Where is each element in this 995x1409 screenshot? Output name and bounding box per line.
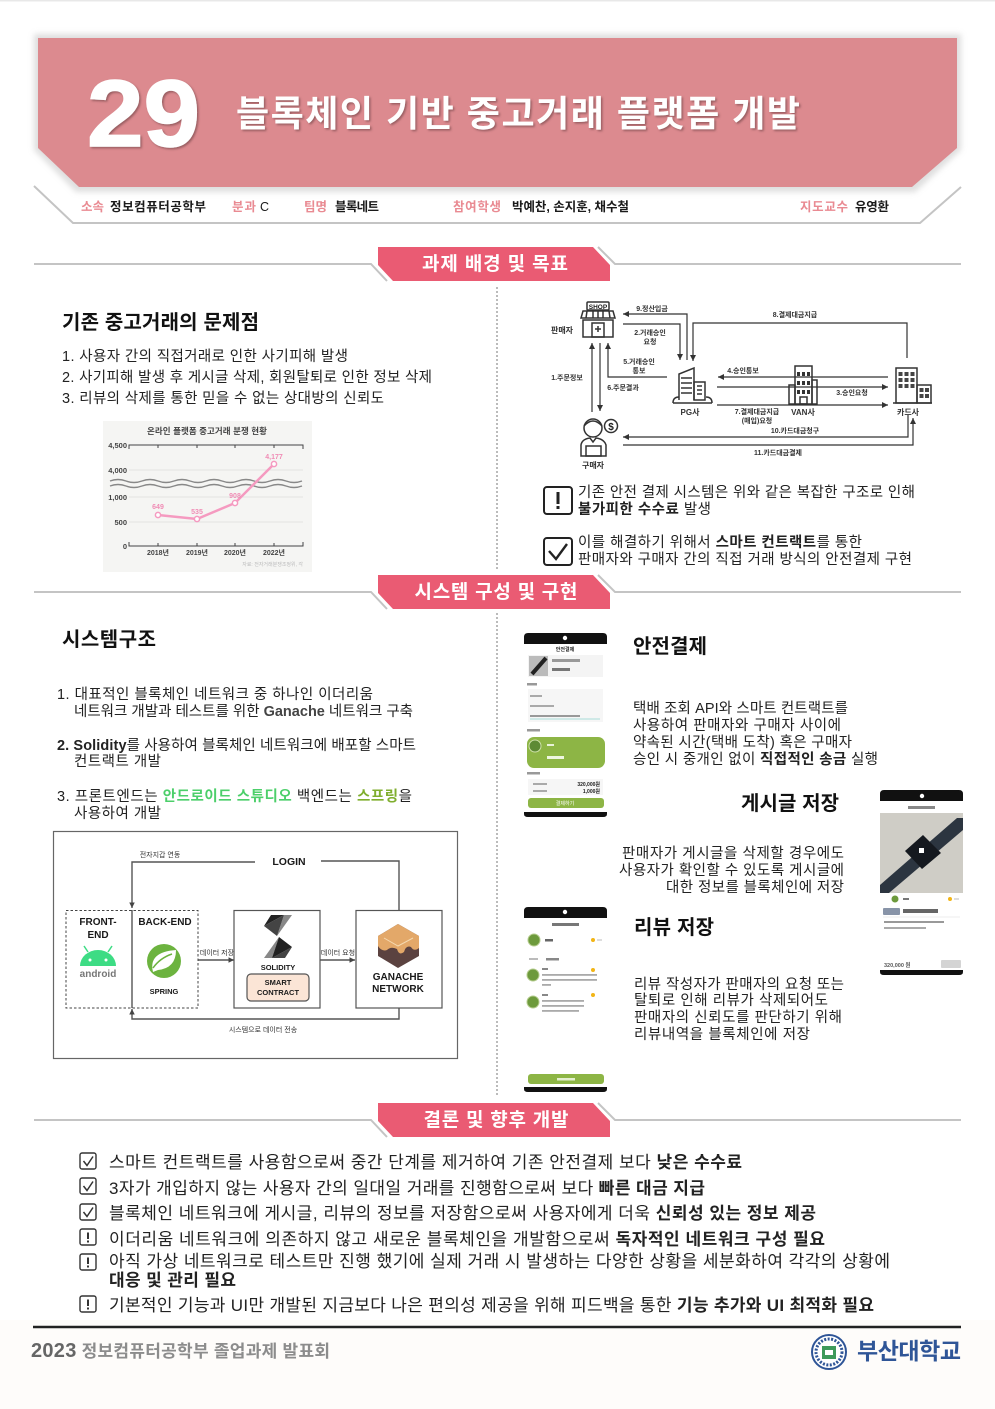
description: 리뷰 저장: 리뷰 작성자가 판매자의 요청 또는 (634, 976, 844, 993)
label: PG사: PG사 (681, 407, 700, 417)
icon: android: android (80, 969, 116, 980)
description: 안전결제: 약속된 시간(택배 도착) 혹은 구매자 (633, 733, 852, 751)
description: 게시글 저장: 사용자가 확인할 수 있도록 게시글에 (619, 862, 844, 879)
heading: 안전결제: 안전결제 (633, 635, 707, 658)
icon: warning box (544, 487, 572, 514)
solidity box: SOLIDITY (261, 963, 295, 972)
label: 카드사: 카드사 (897, 407, 920, 417)
item: response and management (80, 1252, 890, 1290)
footer event name: 2023 정보컴퓨터공학부 졸업과제 발표회 (31, 1340, 330, 1362)
header banner (34, 34, 961, 192)
heading: 시스템구조: 시스템구조 (62, 628, 156, 651)
line chart: 온라인 플랫폼 중고거래 분쟁 현황: 2018년 (147, 548, 169, 557)
meta info row: 팀명 (304, 200, 327, 214)
line chart: 온라인 플랫폼 중고거래 분쟁 현황: 4,500 (108, 441, 127, 450)
item: response and management: 아직 가상 네트워크로 테스트만 진행 했기에 실제 거래 시 발생하는 다양한 상황을 세분화하여 각각의 상황에 (109, 1252, 890, 1271)
description: 게시글 저장 (619, 845, 844, 896)
meta info row: 박예찬, 손지훈, 채수철 (512, 200, 629, 214)
description: 안전결제: 승인 시 중개인 없이 직접적인 송금 실행 (633, 751, 878, 768)
system description list (57, 686, 416, 822)
LOGIN label: LOGIN (272, 856, 306, 868)
line chart: 온라인 플랫폼 중고거래 분쟁 현황: 500 (114, 518, 127, 527)
phone screenshot: 안전결제 (524, 633, 607, 817)
wallet label: 전자지갑 연동 (140, 850, 181, 859)
description: 안전결제 (633, 700, 878, 768)
flow step labels: 6.주문결과 (607, 383, 639, 392)
item: feature additions: 기본적인 기능과 UI만 개발된 지금보다 나은 편의성 제공을 위해 피드백을 통한 기능 추가와 UI 최적화 필요 (109, 1296, 874, 1315)
frontend / backend dashed box: END (87, 930, 109, 941)
flow step labels: 10.카드대금청구 (771, 426, 820, 435)
phone screenshot: 안전결제: 1,000원 (583, 788, 600, 795)
system description list: 1. 대표적인 블록체인 네트워크 중 하나인 이더리움 (57, 686, 373, 703)
meta info row: 소속 (81, 200, 104, 214)
payment flow diagram (551, 302, 932, 470)
description: 리뷰 저장: 탈퇴로 인해 리뷰가 삭제되어도 (634, 992, 828, 1009)
line chart: 온라인 플랫폼 중고거래 분쟁 현황: 자료: 전자거래분쟁조정위, 각 (242, 561, 303, 568)
flow step labels: 3.승인요청 (836, 388, 868, 397)
line chart: 온라인 플랫폼 중고거래 분쟁 현황: 4,000 (108, 466, 127, 475)
line chart: 온라인 플랫폼 중고거래 분쟁 현황 (103, 421, 312, 572)
heading: 리뷰 저장: 리뷰 저장 (634, 916, 714, 939)
label: VAN사: VAN사 (791, 407, 815, 417)
data request label: 데이터 요청 (321, 948, 355, 957)
ganache box: GANACHE (373, 972, 424, 983)
icon: card company building (893, 368, 932, 403)
item: faster payment: 3자가 개입하지 않는 사용자 간의 일대일 거래를 진행함으로써 보다 빠른 대금 지급 (109, 1179, 705, 1198)
flow step labels: (매입)요청 (742, 416, 772, 425)
smart contract badge (247, 974, 309, 1001)
system description list: 3. 프론트엔드는 안드로이드 스튜디오 백엔드는 스프링을 (57, 788, 412, 805)
line chart: 온라인 플랫폼 중고거래 분쟁 현황: 0 (123, 542, 127, 551)
flow arrows (592, 314, 913, 445)
phone screenshot: 안전결제: 320,000원 (577, 781, 600, 788)
description: 리뷰 저장: 리뷰내역을 블록체인에 저장 (634, 1026, 810, 1043)
line chart: 온라인 플랫폼 중고거래 분쟁 현황: 온라인 플랫폼 중고거래 분쟁 현황 (147, 426, 267, 436)
section heading: 과제 배경 및 목표: 과제 배경 및 목표 (422, 253, 568, 275)
description: 안전결제: 사용하여 판매자와 구매자 사이에 (633, 717, 841, 734)
label: 판매자: 판매자 (551, 325, 574, 335)
system data label: 시스템으로 데이터 전송 (229, 1025, 298, 1034)
meta info row: 지도교수 (800, 200, 848, 214)
description: 게시글 저장: 판매자가 게시글을 삭제할 경우에도 (622, 845, 844, 862)
flow step labels: 8.결제대금지급 (773, 310, 818, 319)
solidity box (234, 910, 320, 1008)
description: 리뷰 저장: 판매자의 신뢰도를 판단하기 위해 (634, 1009, 842, 1026)
icon: VAN building (789, 366, 817, 404)
ganache box (356, 910, 442, 1008)
meta info row (34, 186, 961, 223)
problem list: 2. 사기피해 발생 후 게시글 삭제, 회원탈퇴로 인한 정보 삭제 (62, 369, 432, 386)
icon: ganache cube (378, 924, 419, 968)
problem list: 1. 사용자 간의 직접거래로 인한 사기피해 발생 (62, 348, 348, 365)
section heading: 시스템 구성 및 구현 (34, 575, 961, 609)
university logo (812, 1335, 961, 1369)
phone screenshot: 안전결제: 결제하기 (556, 800, 574, 807)
icon: solidity logo (264, 915, 292, 958)
icon: shop (판매자): SHOP (589, 304, 608, 311)
flow step labels: 7.결제대금지급 (735, 407, 780, 416)
line chart: 온라인 플랫폼 중고거래 분쟁 현황: 1,000 (108, 493, 127, 502)
flow step labels: 9.정산입금 (636, 304, 668, 313)
description: 안전결제: 택배 조회 API와 스마트 컨트랙트를 (633, 700, 848, 717)
phone screenshot: 게시글: 320,000 원 (884, 961, 910, 969)
flow step labels (551, 304, 868, 457)
icon: university seal (812, 1335, 846, 1369)
problem list (62, 348, 432, 407)
meta info row: 정보컴퓨터공학부 (110, 199, 206, 214)
line chart: 온라인 플랫폼 중고거래 분쟁 현황: 2022년 (263, 548, 285, 557)
line chart: 온라인 플랫폼 중고거래 분쟁 현황: 649 (152, 504, 164, 511)
callout: smart contract solution (544, 534, 912, 568)
item: independent network: 이더리움 네트워크에 의존하지 않고 새로운 블록체인을 개발함으로써 독자적인 네트워크 구성 필요 (109, 1230, 825, 1249)
icon: PG building (673, 368, 712, 403)
project title: 블록체인 기반 중고거래 플랫폼 개발 (236, 93, 800, 134)
item: lower fees: 스마트 컨트랙트를 사용함으로써 중간 단계를 제거하여 기존 안전결제 보다 낮은 수수료 (109, 1153, 742, 1172)
section heading: 결론 및 향후 개발 (34, 1103, 961, 1137)
section heading: 과제 배경 및 목표 (34, 247, 961, 281)
icon: buyer: $ (608, 422, 614, 433)
problem list: 3. 리뷰의 삭제를 통한 믿을 수 없는 상대방의 신뢰도 (62, 390, 384, 407)
system description list: 2. Solidity를 사용하여 블록체인 네트워크에 배포할 스마트 (57, 737, 416, 754)
item: response and management: 대응 및 관리 필요 (109, 1271, 236, 1290)
section heading: 결론 및 향후 개발: 결론 및 향후 개발 (424, 1109, 568, 1131)
university logo: 부산대학교 (857, 1338, 961, 1364)
meta info row: C (260, 200, 269, 214)
heading: 게시글 저장: 게시글 저장 (741, 792, 839, 815)
line chart: 온라인 플랫폼 중고거래 분쟁 현황: 2019년 (186, 548, 208, 557)
icon: spring: SPRING (150, 987, 179, 996)
line chart: 온라인 플랫폼 중고거래 분쟁 현황: 4,177 (265, 454, 283, 461)
project number: 29 (87, 61, 200, 167)
icon: buyer (581, 419, 618, 456)
icon: shop (판매자) (581, 302, 615, 337)
data save label: 데이터 저장 (200, 948, 235, 957)
description: 게시글 저장: 대한 정보를 블록체인에 저장 (666, 879, 844, 896)
callout: smart contract solution: 판매자와 구매자 간의 직접 거래 방식의 안전결제 구현 (578, 551, 912, 568)
heading: 기존 중고거래의 문제점: 기존 중고거래의 문제점 (62, 311, 259, 334)
ganache box: NETWORK (372, 984, 425, 995)
meta info row: 블록네트 (335, 200, 379, 214)
flow step labels: 11.카드대금결제 (754, 448, 802, 457)
line chart: 온라인 플랫폼 중고거래 분쟁 현황: 2020년 (224, 548, 246, 557)
flow step labels: 5.거래승인 (623, 357, 655, 366)
architecture diagram (54, 832, 458, 1058)
meta info row: 참여학생 (453, 199, 501, 214)
system description list: 사용하여 개발 (74, 805, 161, 822)
flow step labels: 1.주문정보 (551, 373, 583, 382)
callout: problem with existing payment: 기존 안전 결제 시스템은 위와 같은 복잡한 구조로 인해 (578, 484, 915, 501)
connector lines (132, 861, 399, 1019)
icon: check box (544, 538, 572, 565)
meta info row: 분과 (232, 199, 256, 214)
section heading: 시스템 구성 및 구현: 시스템 구성 및 구현 (414, 581, 578, 603)
line chart: 온라인 플랫폼 중고거래 분쟁 현황: 908 (229, 493, 241, 500)
label: 구매자: 구매자 (582, 460, 605, 470)
flow step labels: 요청 (644, 337, 656, 346)
phone screenshot: 리뷰 (524, 907, 607, 1092)
smart contract badge: CONTRACT (257, 988, 299, 997)
callout: problem with existing payment: 불가피한 수수료 발생 (578, 501, 711, 518)
conclusion list (80, 1153, 890, 1315)
phone screenshot: 안전결제: 안전결제 (556, 646, 575, 653)
frontend / backend dashed box: FRONT- (79, 917, 117, 928)
callout: problem with existing payment (544, 484, 915, 518)
flow step labels: 2.거래승인 (634, 328, 666, 337)
callout: smart contract solution: 이를 해결하기 위해서 스마트 컨트랙트를 통한 (578, 534, 862, 551)
phone screenshot: 게시글 (880, 790, 963, 975)
system description list: 네트워크 개발과 테스트를 위한 Ganache 네트워크 구축 (74, 703, 413, 720)
flow step labels: 4.승인통보 (727, 366, 759, 375)
line chart: 온라인 플랫폼 중고거래 분쟁 현황: 535 (191, 509, 203, 516)
frontend / backend dashed box (66, 910, 198, 1008)
item: trustworthy information: 블록체인 네트워크에 게시글, 리뷰의 정보를 저장함으로써 사용자에게 더욱 신뢰성 있는 정보 제공 (109, 1204, 816, 1223)
flow step labels: 통보 (633, 367, 646, 375)
system description list: 컨트랙트 개발 (74, 753, 161, 770)
description: 리뷰 저장 (634, 976, 844, 1043)
smart contract badge: SMART (265, 978, 292, 987)
frontend / backend dashed box: BACK-END (138, 917, 192, 928)
meta info row: 유영환 (855, 200, 889, 214)
